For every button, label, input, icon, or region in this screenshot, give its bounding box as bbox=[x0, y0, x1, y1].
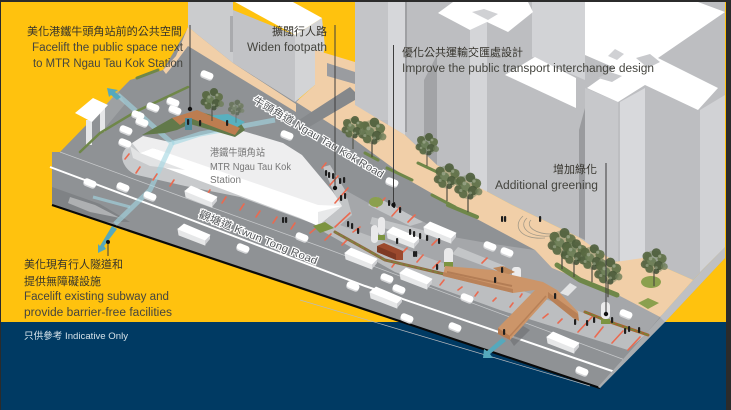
grass patch by station bbox=[313, 222, 334, 233]
lift towers bbox=[371, 217, 610, 324]
callout: additional greening bbox=[495, 162, 598, 192]
amphitheatre steps bbox=[518, 216, 555, 238]
callout: interchange design bbox=[402, 45, 654, 75]
road name: Ngau Tau Kok Road: 牛頭角道 Ngau Tau Kok Road bbox=[250, 93, 386, 181]
station building bbox=[122, 128, 342, 226]
orange plaza deck bbox=[172, 110, 240, 135]
paved footpaths bbox=[163, 27, 693, 317]
callout: subway facelift: 提供無障礙設施 bbox=[24, 274, 101, 288]
plaza lift kiosk bbox=[185, 118, 192, 130]
callout: facelift public space bbox=[27, 24, 184, 70]
navy footer band bbox=[0, 322, 731, 410]
parking bay marks bbox=[125, 154, 640, 350]
grass islands bbox=[369, 197, 661, 309]
callout: widen footpath: Widen footpath bbox=[247, 42, 327, 54]
subway exit arrows bbox=[98, 88, 506, 358]
planted brown strips along platforms bbox=[335, 232, 648, 335]
station label: Station bbox=[210, 175, 241, 186]
callout: subway facelift bbox=[24, 257, 172, 319]
road name: Kwun Tong Road: 觀塘道 Kwun Tong Road bbox=[197, 208, 320, 267]
yellow background bbox=[0, 0, 731, 322]
plaza garden patch bbox=[142, 112, 245, 137]
callout: subway facelift: Facelift existing subway and bbox=[24, 291, 169, 303]
callout: facelift public space: to MTR Ngau Tau Kok Station bbox=[33, 58, 183, 70]
callout: facelift public space: 美化港鐵牛頭角站前的公共空間 bbox=[27, 24, 182, 38]
station label: 港鐵牛頭角站 bbox=[210, 146, 265, 159]
entrance canopy bbox=[75, 90, 125, 145]
left tower block bbox=[188, 2, 325, 102]
buses bbox=[178, 186, 579, 353]
cars bbox=[82, 69, 633, 378]
leader line: widen footpath bbox=[333, 25, 337, 190]
crosswalk bbox=[560, 283, 577, 296]
subway route (underground, translucent) bbox=[93, 95, 275, 224]
callout: widen footpath bbox=[247, 24, 327, 54]
leader line: public space bbox=[188, 25, 192, 111]
station label bbox=[210, 146, 292, 186]
callout: interchange design: Improve the public transport interchange design bbox=[402, 63, 654, 75]
station label: MTR Ngau Tau Kok bbox=[210, 162, 292, 173]
callout: additional greening: Additional greening bbox=[495, 180, 598, 192]
callout: subway facelift: 美化現有行人隧道和 bbox=[24, 257, 123, 271]
disclaimer note: 只供參考 Indicative Only bbox=[24, 330, 128, 342]
red kiosk bbox=[377, 243, 403, 260]
bus interchange islands bbox=[317, 165, 505, 272]
callout: widen footpath: 擴闊行人路 bbox=[272, 24, 327, 38]
pedestrians bbox=[187, 119, 640, 335]
right tower blocks bbox=[355, 2, 725, 280]
street trees bbox=[200, 88, 668, 297]
leader line: additional greening bbox=[604, 163, 608, 316]
footbridge bbox=[443, 266, 579, 346]
callout: subway facelift: provide barrier-free facilities bbox=[24, 307, 172, 319]
landscape planting strips bbox=[80, 70, 617, 295]
callout: interchange design: 優化公共運輸交匯處設計 bbox=[402, 45, 523, 59]
leader line: subway bbox=[106, 240, 110, 256]
leader line: interchange design bbox=[391, 45, 396, 207]
callout: additional greening: 增加綠化 bbox=[553, 162, 597, 176]
callout: facelift public space: Facelift the public space next bbox=[32, 42, 184, 54]
